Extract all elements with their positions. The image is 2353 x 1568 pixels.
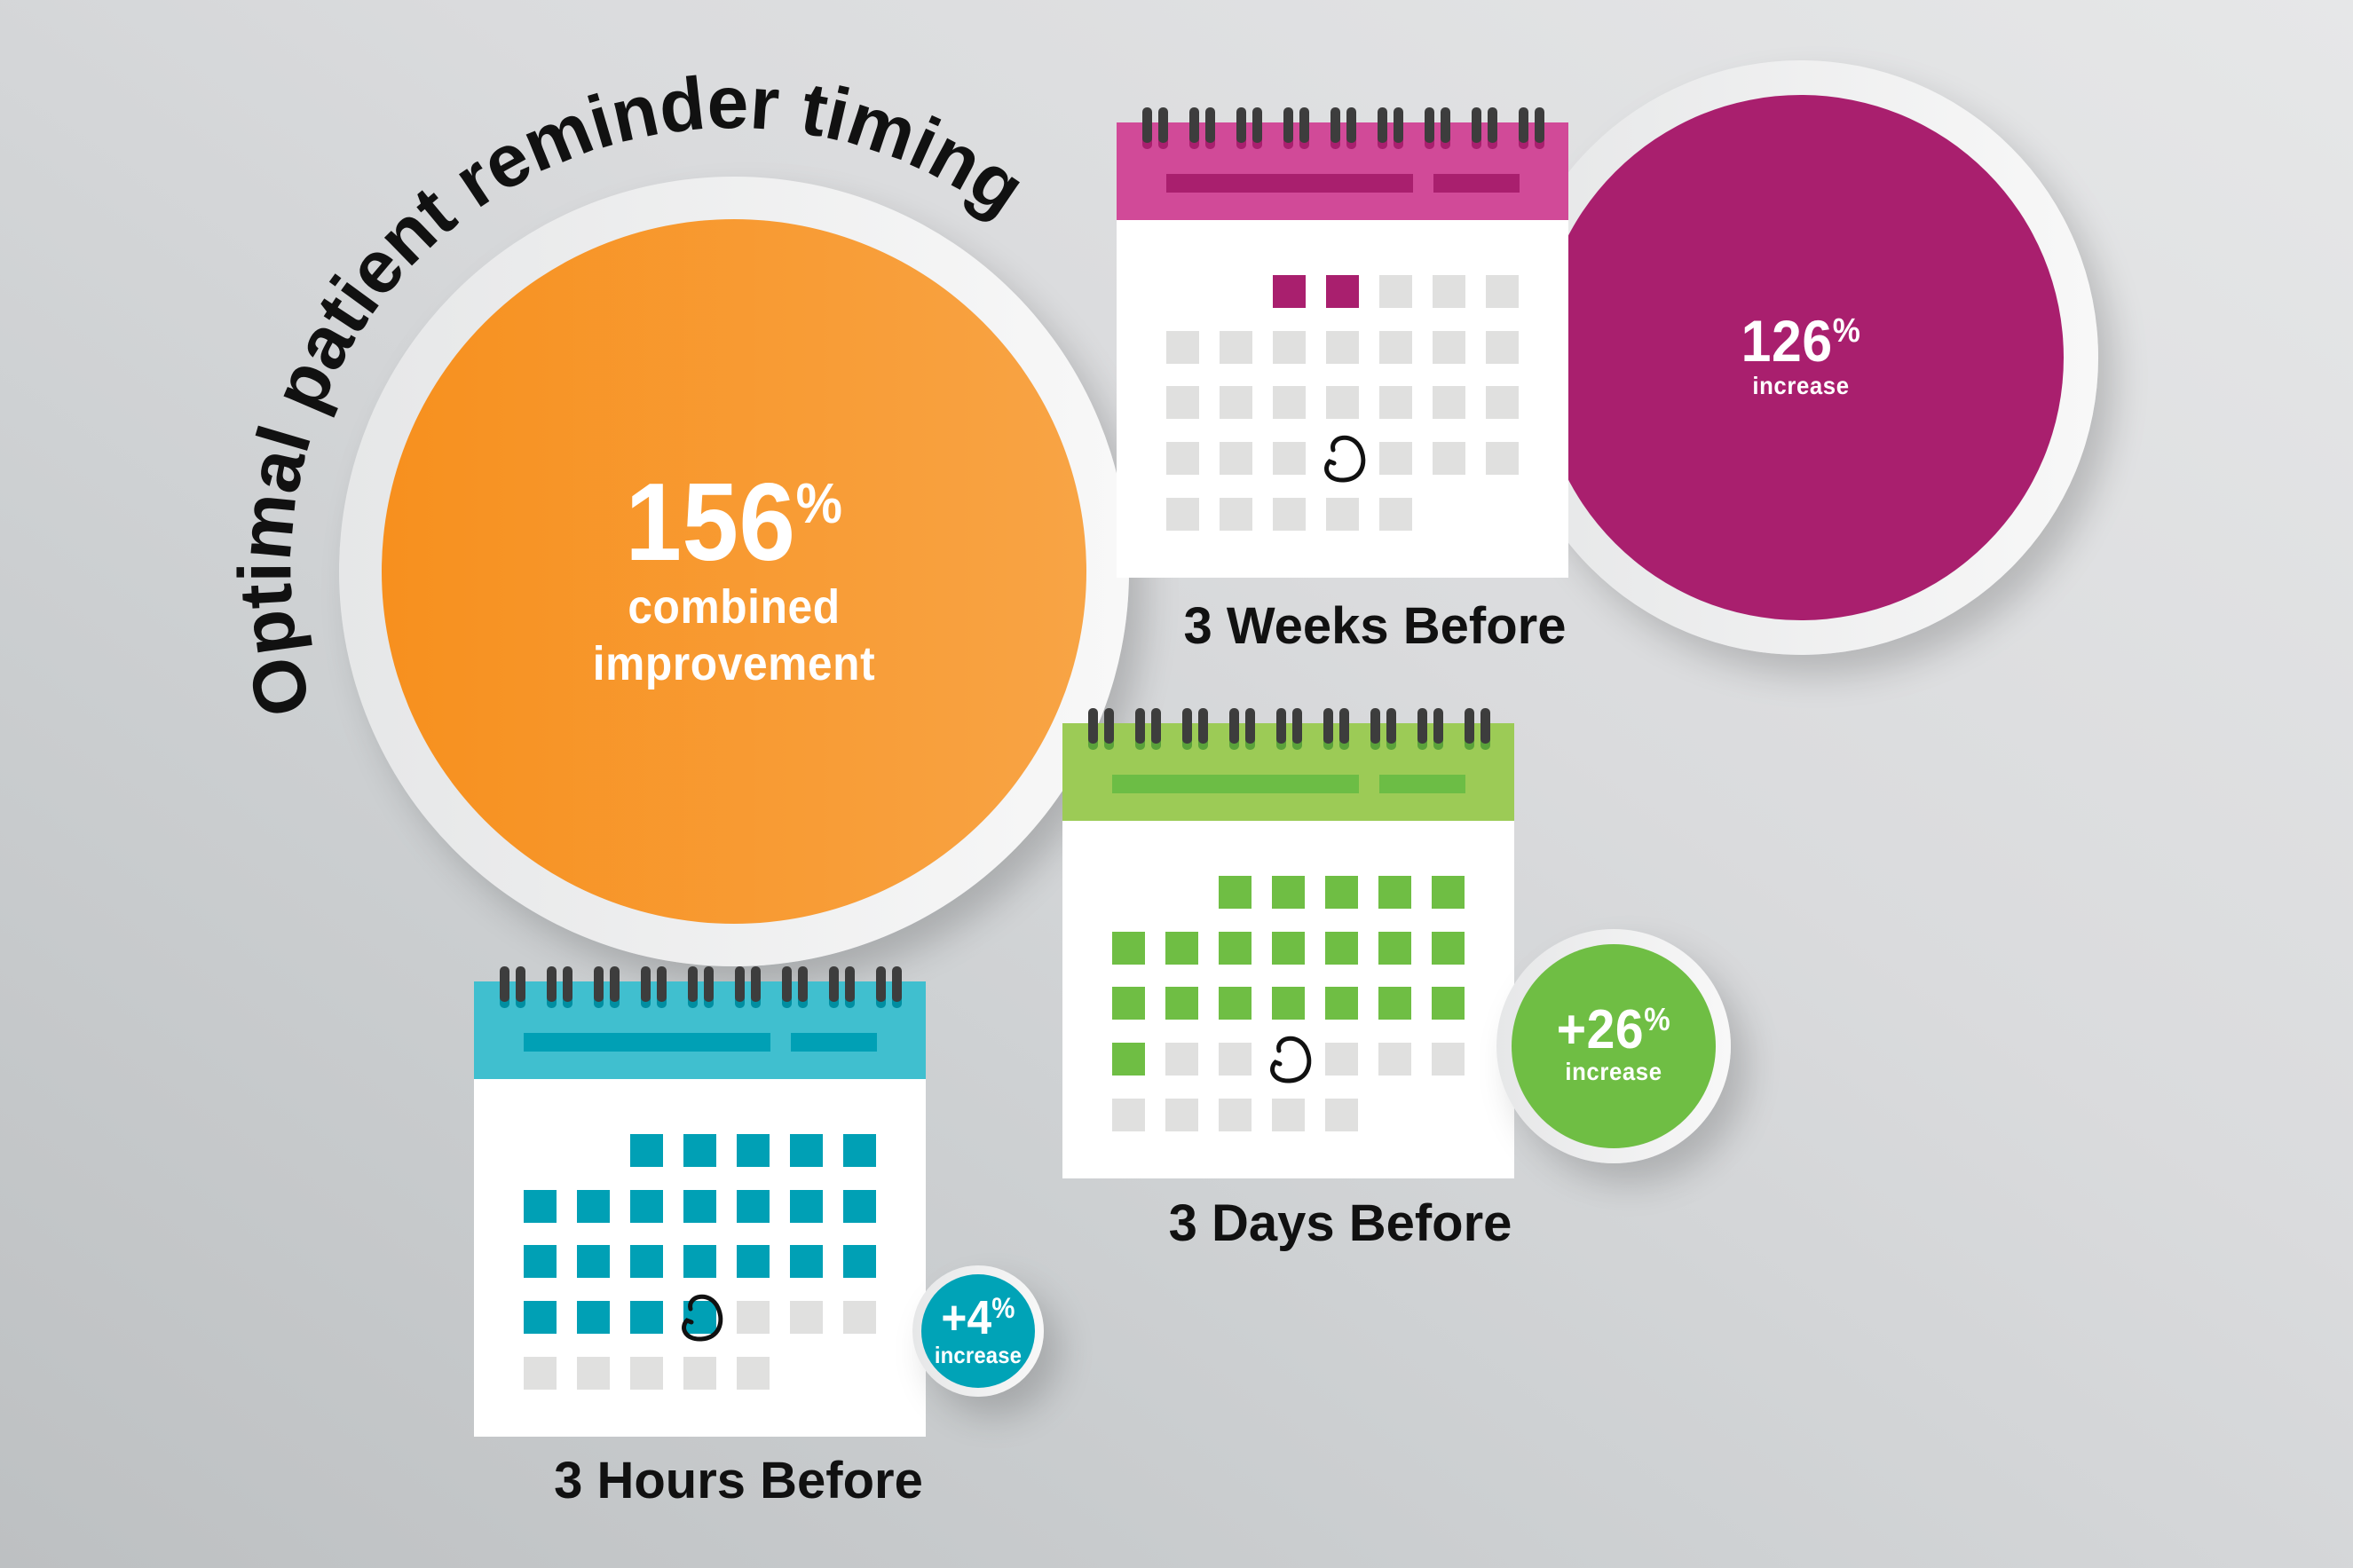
calendar: 3 weeks before [1117, 107, 1568, 578]
stat text [935, 1291, 1022, 1368]
label: 3 weeks before: 3 Weeks Before [1184, 597, 1566, 655]
big stat text: 156% [625, 461, 843, 584]
calendar: 3 hours before [474, 966, 926, 1437]
curved title: Optimal patient reminder timing [236, 75, 1020, 713]
green circle: +26% increase [1496, 929, 1731, 1163]
stat text: increase [1565, 1058, 1662, 1085]
big stat text: improvement [593, 637, 875, 690]
big stat text [593, 461, 875, 690]
magenta circle: 126% increase [1504, 60, 2098, 655]
stat text: +26% [1557, 999, 1670, 1060]
label: 3 hours before: 3 Hours Before [554, 1452, 923, 1509]
teal circle: +4% increase [912, 1265, 1044, 1397]
stat text: increase [1752, 372, 1850, 399]
big stat text: combined [628, 580, 841, 634]
stat text: increase [935, 1342, 1022, 1368]
orange disc [382, 219, 1086, 924]
stat text: +4% [941, 1291, 1015, 1344]
calendar: 3 days before [1062, 708, 1514, 1178]
stat text: 126% [1741, 308, 1860, 374]
orange circle: 156% combined improvement [339, 177, 1129, 966]
label: 3 days before: 3 Days Before [1169, 1194, 1512, 1252]
